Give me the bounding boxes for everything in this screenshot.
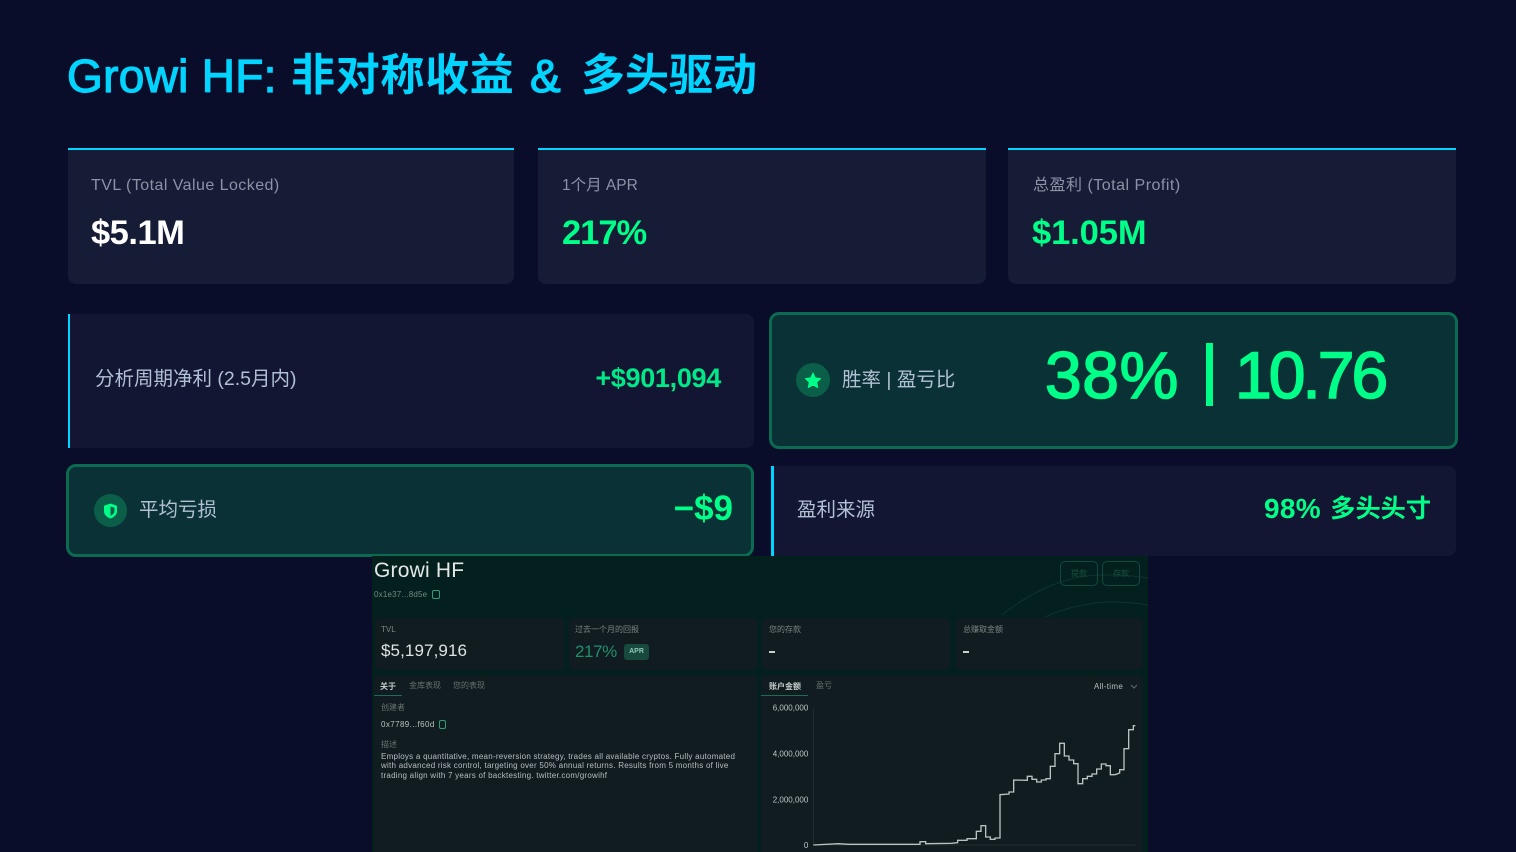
line chart: 4,000,000	[773, 749, 809, 758]
panel: average loss	[66, 464, 754, 557]
description text: with advanced risk control, targeting over 50% annual returns. Results from 5 months of live	[381, 761, 729, 770]
win rate label: 胜率 | 盈亏比	[842, 369, 955, 391]
tab underline	[374, 695, 402, 696]
button: withdraw	[1060, 561, 1098, 586]
dropdown chevron	[1130, 684, 1138, 689]
panel: account value chart	[761, 675, 1143, 852]
decorative arcs	[1002, 574, 1148, 618]
stat: your deposit	[762, 618, 950, 670]
button: withdraw: 提款	[1071, 569, 1087, 578]
panel: win rate and profit factor	[769, 312, 1458, 449]
TVL value: $5.1M	[91, 214, 184, 252]
stat value	[963, 651, 969, 653]
total profit value: $1.05M	[1032, 214, 1146, 252]
button: deposit: 存款	[1113, 569, 1129, 578]
average loss label: 平均亏损	[139, 499, 217, 521]
line chart: 2,000,000	[773, 795, 809, 804]
panel: 1 month APR	[538, 148, 986, 284]
description label: 描述	[381, 740, 397, 749]
description text: Employs a quantitative, mean-reversion strategy, trades all available cryptos. Fully automated	[381, 752, 735, 761]
panel: about	[374, 675, 757, 852]
title: Growi HF:	[67, 50, 277, 102]
total profit label: 总盈利 (Total Profit)	[1033, 177, 1181, 194]
icon: copy creator	[439, 720, 446, 729]
creator label: 创建者	[381, 703, 405, 712]
creator address: 0x7789...f60d	[381, 720, 435, 729]
profit source value: 多头头寸	[1330, 495, 1431, 523]
time range selector: All-time	[1094, 682, 1123, 691]
APR value: 217%	[562, 214, 646, 252]
win rate value	[1045, 338, 1386, 412]
tab: about: 关于	[380, 682, 396, 691]
APR badge	[624, 644, 649, 660]
stat value: $5,197,916	[381, 641, 467, 660]
net profit label: 分析周期净利 (2.5月内)	[95, 368, 297, 390]
title: &	[530, 50, 561, 102]
stat: TVL	[375, 618, 564, 670]
title: 多头驱动	[581, 51, 757, 100]
description text: trading align with 7 years of backtesting. twitter.com/growihf	[381, 771, 607, 780]
vault name: Growi HF	[374, 559, 464, 582]
stat label: 您的存款	[769, 625, 801, 634]
stat label: TVL	[381, 625, 396, 634]
panel: TVL	[68, 148, 514, 284]
profit source value: 98%	[1264, 493, 1321, 524]
dashboard screenshot	[372, 556, 1148, 852]
tab: pnl: 盈亏	[816, 681, 832, 690]
APR label: 1个月 APR	[562, 177, 638, 194]
line chart: 6,000,000	[773, 703, 809, 712]
tab: vault performance: 金库表现	[409, 681, 441, 690]
line chart	[772, 703, 1136, 850]
panel: net profit	[68, 314, 754, 448]
win rate value: 38%	[1045, 338, 1179, 412]
profit source label: 盈利来源	[797, 499, 875, 521]
stat value	[769, 651, 775, 653]
button: deposit	[1102, 561, 1140, 586]
title: 非对称收益	[291, 51, 514, 100]
icon: shield	[94, 494, 127, 527]
tab: account value: 账户金额	[769, 682, 801, 691]
stat: total earned	[956, 618, 1143, 670]
panel: profit source	[771, 466, 1456, 556]
title	[67, 50, 757, 102]
stat value: 217%	[575, 642, 617, 661]
profit source value	[1264, 493, 1431, 524]
net profit value: +$901,094	[595, 363, 721, 393]
TVL label: TVL (Total Value Locked)	[91, 177, 280, 194]
tab underline	[761, 695, 808, 696]
icon: star	[796, 363, 830, 397]
description text	[381, 752, 735, 780]
stat label: 过去一个月的回报	[575, 625, 639, 634]
stat label: 总赚取金额	[963, 625, 1003, 634]
line chart: 0	[804, 841, 809, 850]
stat: monthly return	[569, 618, 757, 670]
win rate value: 10.76	[1235, 338, 1385, 412]
average loss value: −$9	[674, 489, 733, 528]
panel: total profit	[1008, 148, 1456, 284]
icon: copy address	[432, 590, 440, 599]
APR badge: APR	[629, 648, 644, 655]
vault address: 0x1e37...8d5e	[374, 590, 427, 599]
tab: your performance: 您的表现	[453, 681, 485, 690]
